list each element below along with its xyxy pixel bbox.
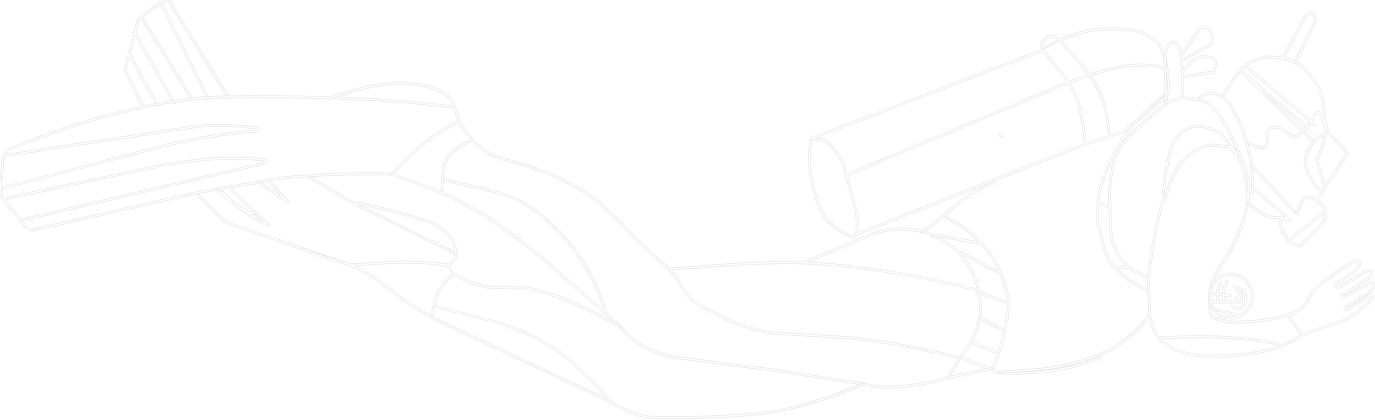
ankle cuff [333,83,472,174]
lower swim fin ribs [198,182,350,265]
regulator and hose [1248,167,1325,246]
hooded head and snorkel [1223,13,1328,148]
air tank [809,29,1168,237]
main swim fin with slits [0,97,453,230]
upper swim fin blade [125,1,228,107]
buoyancy collar [1097,95,1167,290]
dive mask [1305,132,1348,190]
shoulder emblem [1210,274,1252,318]
torso and shoulder [1000,93,1302,372]
tank valve knobs [1165,27,1215,100]
upper leg [392,140,993,387]
thigh [670,229,981,378]
arm and hand [1209,261,1374,335]
wetsuit waist band [923,183,1100,373]
lower leg [300,177,863,418]
